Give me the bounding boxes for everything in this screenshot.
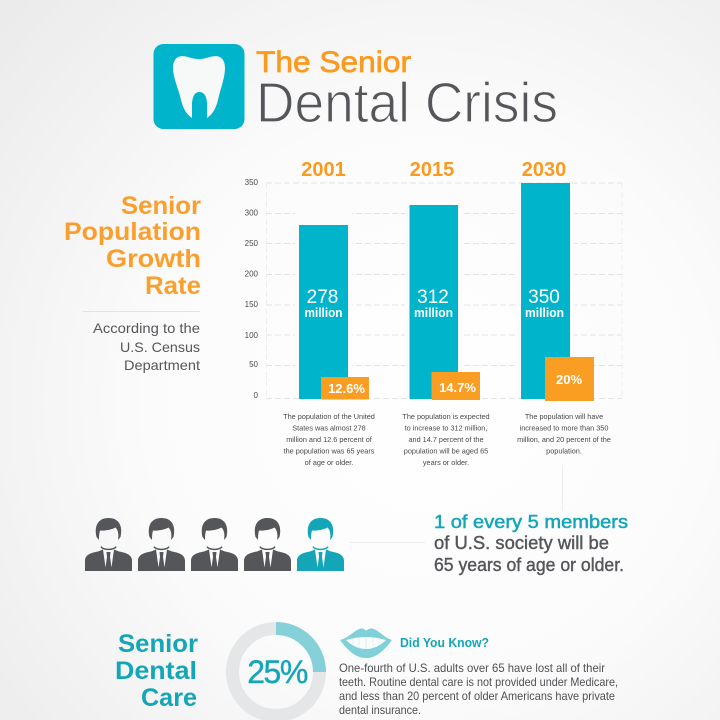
bar: 2015: 14.7% (439, 380, 476, 395)
bar: 2030: million (525, 305, 564, 320)
text block: 2001 description: million and 12.6 percent of (286, 435, 373, 444)
body text: One-fourth of U.S. adults over 65 have lost all of their (339, 661, 605, 675)
bar: 2015: million (414, 305, 453, 320)
body text: dental insurance. (339, 703, 421, 717)
title line: Dental Crisis: Dental Crisis (256, 71, 558, 135)
header: logo and title (154, 44, 558, 135)
y axis labels: 100 (245, 331, 259, 340)
callout: 1 of every 5 members: 65 years of age or older. (434, 555, 624, 575)
text block: 2001 description: of age or older. (305, 458, 353, 467)
text block: 2030 description: The population will have (525, 412, 603, 421)
year labels: 2001 (301, 159, 346, 181)
year labels (301, 159, 566, 181)
text block: 2001 description: The population of the United (283, 412, 375, 421)
heading: Senior Dental Care: Care (141, 684, 197, 712)
heading: Senior Population Growth Rate (64, 192, 201, 300)
text block: 2015 description: The population is expected (402, 412, 490, 421)
bar: 2001 (299, 225, 369, 400)
text block: 2015 description: to increase to 312 million, (405, 424, 487, 432)
heading: Senior Population Growth Rate: Population (64, 218, 201, 246)
text block: 2030 description: population. (546, 446, 582, 456)
did you know text (339, 636, 618, 717)
donut chart: 25 percent: 25% (247, 654, 308, 690)
donut chart: 25 percent (232, 628, 320, 716)
y axis labels: 200 (245, 270, 259, 278)
title line: The Senior: The Senior (256, 46, 411, 79)
heading: Senior Population Growth Rate: Growth (106, 245, 201, 273)
bar: 2001: 12.6% (328, 381, 365, 396)
year labels: 2030 (522, 159, 566, 181)
y axis labels: 250 (245, 239, 259, 248)
y axis labels: 0 (254, 391, 259, 400)
y axis labels: 350 (245, 178, 259, 187)
text block: 2015 description: years or older. (423, 458, 469, 467)
callout: 1 of every 5 members: 1 of every 5 members (434, 512, 628, 532)
icon: person 4 (244, 518, 291, 571)
y axis labels: 300 (245, 208, 259, 218)
bar: 2030 (521, 183, 594, 401)
subheading: Did You Know?: Did You Know? (400, 636, 489, 650)
bar: 2001: million (304, 305, 343, 320)
body text: teeth. Routine dental care is not provided under Medicare, (339, 675, 618, 689)
icon: person 3 (191, 518, 238, 571)
bar: 2030: 350 (528, 287, 560, 308)
body text: and less than 20 percent of older Americans have private (339, 689, 615, 703)
text block: 2030 description: million, and 20 percent of the (517, 435, 611, 444)
heading: Senior Population Growth Rate: Senior (121, 192, 201, 220)
icon: tooth logo (154, 44, 244, 129)
bar: 2001: 278 (307, 287, 338, 308)
heading: Senior Dental Care: Senior (118, 630, 198, 658)
source note: Department (124, 357, 200, 373)
panel: senior population growth heading (64, 192, 201, 373)
bar: 2030: 20% (556, 372, 582, 387)
text block: 2001 description (283, 412, 375, 467)
year labels: 2015 (410, 159, 454, 181)
heading: Senior Dental Care (115, 630, 198, 712)
heading: Senior Population Growth Rate: Rate (145, 272, 201, 300)
text block: 2001 description: States was almost 278 (292, 424, 366, 432)
bar: 2015: 312 (417, 287, 449, 308)
text block: 2015 description: and 14.7 percent of the (408, 435, 484, 444)
icon row: five people, one highlighted (85, 518, 344, 571)
y axis labels (245, 178, 259, 400)
y axis labels: 150 (245, 300, 259, 309)
y axis labels: 50 (249, 360, 259, 369)
icon: person 2 (138, 518, 185, 571)
text block: 2030 description: increased to more than 350 (520, 424, 608, 432)
source note: U.S. Census (120, 339, 200, 355)
body text (339, 661, 618, 717)
icon: smiling lips (340, 628, 392, 658)
bar: 2015 (410, 205, 480, 400)
source note (93, 320, 200, 373)
source note: According to the (93, 320, 200, 336)
callout: 1 of every 5 members (434, 512, 628, 575)
icon: person 1 (85, 518, 132, 571)
text block: 2015 description (402, 412, 490, 467)
text block: 2001 description: the population was 65 years (284, 446, 375, 456)
text block: 2015 description: population will be aged 65 (404, 446, 488, 456)
callout: 1 of every 5 members: of U.S. society will be (434, 533, 609, 553)
text block: 2030 description (517, 412, 611, 456)
bar chart: population by year (245, 159, 622, 401)
heading: Senior Dental Care: Dental (115, 657, 197, 685)
icon: person 5 highlighted (297, 518, 344, 571)
